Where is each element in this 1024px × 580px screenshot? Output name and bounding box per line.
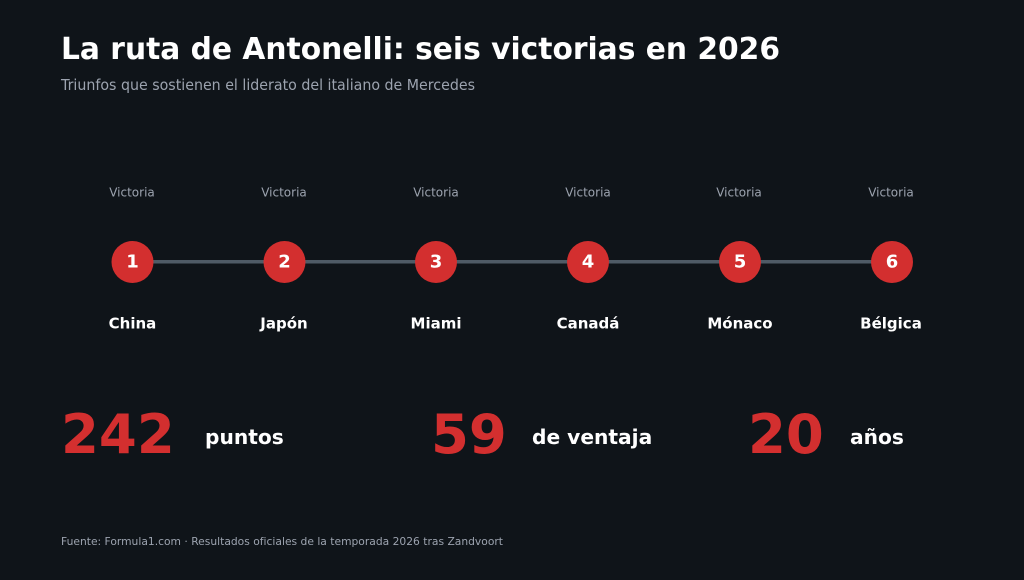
milestone 6: Bélgica: 6: [886, 252, 898, 272]
milestone 3: Miami: 3: [430, 252, 442, 272]
milestone 1: China: China: [109, 314, 156, 332]
stat: de ventaja: de ventaja: [532, 425, 652, 449]
stat: puntos: puntos: [205, 425, 284, 449]
stat: puntos: [61, 402, 284, 466]
milestone 4: Canadá: 4: [582, 252, 594, 272]
milestone 4: Canadá: Victoria: [565, 186, 611, 200]
milestone 1: China: Victoria: [109, 186, 155, 200]
milestone 6: Bélgica: Victoria: [868, 186, 914, 200]
milestone 5: Mónaco: [707, 186, 773, 332]
stat: de ventaja: 59: [431, 402, 507, 466]
timeline: [109, 186, 922, 332]
milestone 2: Japón: Japón: [259, 314, 308, 332]
milestone 1: China: 1: [126, 252, 139, 272]
stat: de ventaja: [431, 402, 652, 466]
milestone 3: Miami: [411, 186, 461, 332]
milestone 5: Mónaco: 5: [734, 252, 746, 272]
milestone 6: Bélgica: [860, 186, 922, 332]
milestone 4: Canadá: [557, 186, 619, 332]
source note: Fuente: Formula1.com · Resultados oficiales de la temporada 2026 tras Zandvoort: [61, 535, 504, 548]
stat: años: años: [850, 425, 904, 449]
stat: años: [748, 402, 904, 466]
milestone 3: Miami: Miami: [411, 314, 461, 332]
milestone 3: Miami: Victoria: [413, 186, 459, 200]
title: La ruta de Antonelli: seis victorias en 2026: [61, 32, 780, 67]
stat: años: 20: [748, 402, 824, 466]
milestone 2: Japón: Victoria: [261, 186, 307, 200]
milestone 6: Bélgica: Bélgica: [860, 314, 922, 332]
stat: puntos: 242: [61, 402, 175, 466]
subtitle: Triunfos que sostienen el liderato del italiano de Mercedes: [60, 76, 475, 94]
milestone 2: Japón: [259, 186, 308, 332]
milestone 5: Mónaco: Mónaco: [707, 314, 773, 332]
milestone 5: Mónaco: Victoria: [716, 186, 762, 200]
milestone 4: Canadá: Canadá: [557, 314, 619, 332]
milestone 1: China: [109, 186, 156, 332]
milestone 2: Japón: 2: [278, 252, 291, 272]
